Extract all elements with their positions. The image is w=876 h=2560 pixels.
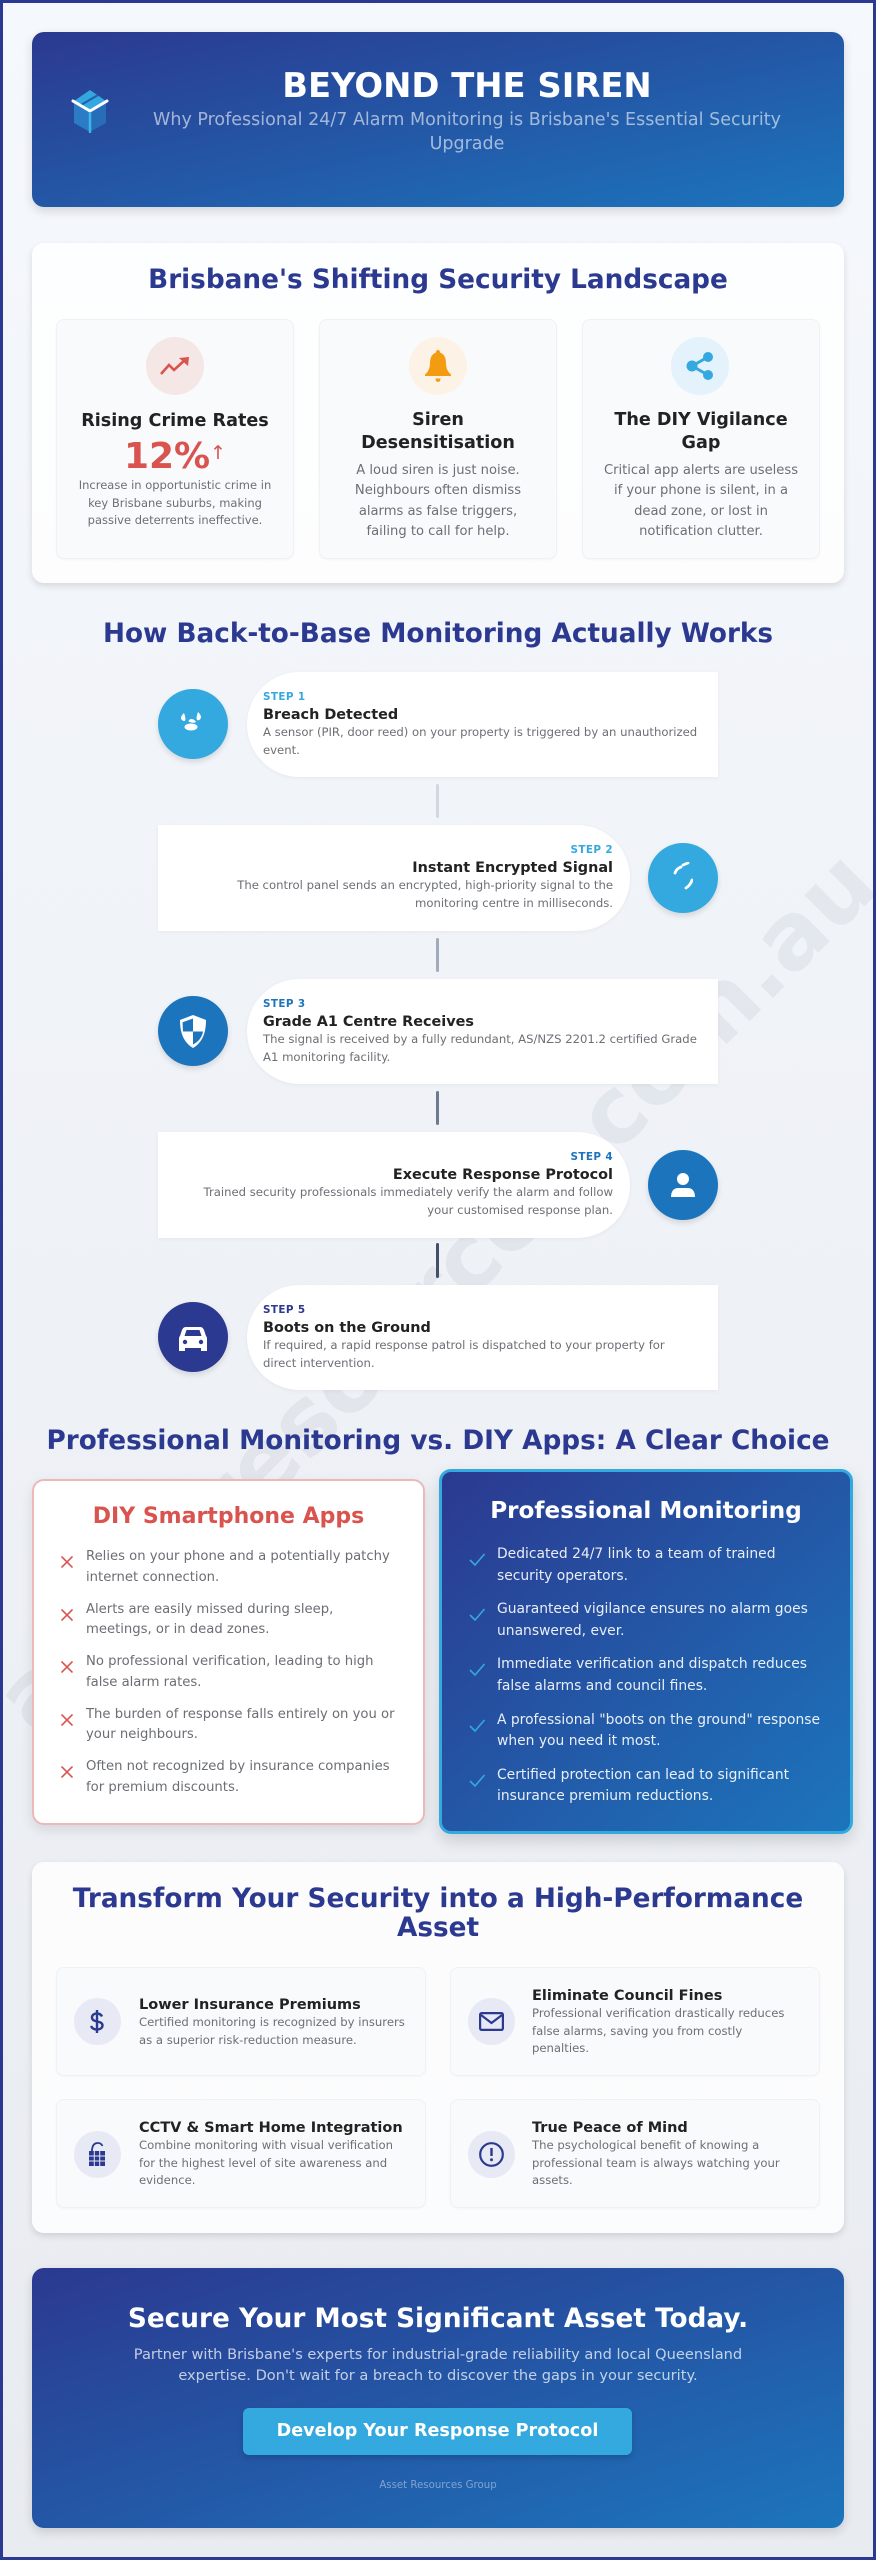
- step card: [247, 672, 718, 777]
- card text: if your phone is silent, in a: [614, 483, 788, 498]
- connector: [436, 1091, 439, 1125]
- step description: [237, 878, 613, 910]
- icon: dollar: [74, 1998, 121, 2045]
- item 4: A professional "boots on the ground" response: [497, 1712, 820, 1728]
- item 1: security operators.: [497, 1568, 628, 1584]
- item 5: Certified protection can lead to significant: [497, 1766, 789, 1782]
- benefit text: [532, 2138, 780, 2187]
- card text: [355, 463, 521, 539]
- benefit text: evidence.: [139, 2173, 195, 2187]
- benefit text: false alarms, saving you from costly: [532, 2024, 742, 2038]
- benefit title: True Peace of Mind: [532, 2120, 688, 2136]
- step title: Breach Detected: [263, 707, 398, 723]
- item 4: your neighbours.: [86, 1727, 198, 1742]
- card text: alarms as false triggers,: [359, 504, 517, 519]
- icon: share nodes: [671, 337, 729, 395]
- step card: [247, 979, 718, 1084]
- step description: A sensor (PIR, door reed) on your property is triggered by an unauthorized: [263, 725, 697, 739]
- benefit text: Professional verification drastically reduces: [532, 2006, 784, 2020]
- step description: monitoring centre in milliseconds.: [415, 896, 613, 910]
- item 4: [61, 1706, 395, 1742]
- benefit text: [139, 2015, 405, 2047]
- CTA text: Partner with Brisbane's experts for industrial-grade reliability and local Queensland: [134, 2346, 742, 2363]
- list: professional benefits: [470, 1546, 820, 1804]
- call to action banner: [32, 2268, 844, 2528]
- benefit text: as a superior risk-reduction measure.: [139, 2033, 357, 2047]
- statistic: 12 percent up: 12%↑: [124, 436, 226, 477]
- item 1: Dedicated 24/7 link to a team of trained: [497, 1546, 776, 1562]
- hero subtitle: [153, 110, 781, 154]
- step label: STEP 4: [570, 1151, 613, 1163]
- benefit text: [139, 2138, 393, 2187]
- hero subtitle: Upgrade: [430, 134, 504, 154]
- step label: STEP 3: [263, 998, 306, 1010]
- card: true peace of mind: [450, 2099, 820, 2208]
- icon: padlock grid: [74, 2131, 121, 2178]
- step description: [262, 1032, 697, 1064]
- benefit text: Combine monitoring with visual verification: [139, 2138, 393, 2152]
- item 4: The burden of response falls entirely on you or: [86, 1706, 395, 1722]
- card: DIY vigilance gap: [582, 319, 820, 559]
- item 2: Alerts are easily missed during sleep,: [86, 1602, 333, 1616]
- step description: [263, 725, 697, 756]
- item 5: [470, 1766, 789, 1804]
- card text: Critical app alerts are useless: [604, 463, 798, 478]
- step description: The signal is received by a fully redundant, AS/NZS 2201.2 certified Grade: [263, 1032, 697, 1046]
- card: lower insurance premiums: [56, 1967, 426, 2076]
- item 2: Guaranteed vigilance ensures no alarm goes: [497, 1601, 808, 1617]
- benefit title: Eliminate Council Fines: [532, 1988, 722, 2004]
- step description: Trained security professionals immediately verify the alarm and follow: [204, 1185, 613, 1199]
- hero banner: [32, 32, 844, 207]
- card title: The DIY Vigilance: [614, 410, 788, 430]
- icon: shield: [158, 996, 228, 1066]
- step label: STEP 1: [263, 691, 306, 703]
- connector: [436, 784, 439, 818]
- connector: [436, 938, 439, 972]
- panel: DIY smartphone apps: [32, 1479, 425, 1825]
- card text: failing to call for help.: [366, 524, 510, 539]
- item 5: [61, 1759, 390, 1794]
- card: CCTV and smart home: [56, 2099, 426, 2208]
- item 2: [470, 1601, 808, 1638]
- benefit title: Lower Insurance Premiums: [139, 1997, 361, 2013]
- item 4: when you need it most.: [497, 1733, 660, 1749]
- card title: [361, 410, 515, 453]
- benefit text: professional team is always watching your: [532, 2156, 780, 2170]
- card text: [604, 463, 798, 539]
- step title: Instant Encrypted Signal: [412, 860, 613, 876]
- step card: [247, 1285, 718, 1390]
- card text: key Brisbane suburbs, making: [88, 496, 262, 510]
- card text: Neighbours often dismiss: [355, 483, 521, 498]
- item 2: meetings, or in dead zones.: [86, 1622, 269, 1637]
- footer credit: Asset Resources Group: [379, 2480, 497, 2491]
- step 3: [156, 979, 718, 1084]
- step 2: [158, 825, 720, 931]
- CTA heading: Secure Your Most Significant Asset Today.: [128, 2304, 748, 2334]
- panel title: DIY Smartphone Apps: [93, 1504, 364, 1529]
- card title: Desensitisation: [361, 433, 515, 453]
- icon: breach signal: [158, 689, 228, 759]
- step description: A1 monitoring facility.: [263, 1050, 390, 1064]
- card text: passive deterrents ineffective.: [88, 513, 262, 527]
- step description: event.: [263, 742, 300, 756]
- step title: Boots on the Ground: [263, 1320, 431, 1336]
- panel: professional monitoring: [439, 1469, 853, 1834]
- step description: [263, 1338, 665, 1370]
- card text: A loud siren is just noise.: [356, 463, 520, 478]
- heading: how monitoring works: How Back-to-Base Monitoring Actually Works: [103, 619, 773, 649]
- item 1: [61, 1549, 390, 1584]
- CTA text: [134, 2346, 742, 2384]
- step label: STEP 5: [263, 1304, 306, 1316]
- item 3: [61, 1654, 374, 1690]
- card: eliminate council fines: [450, 1967, 820, 2076]
- CTA button: Develop Your Response Protocol: [277, 2421, 598, 2441]
- icon: trend line: [146, 337, 204, 395]
- card title: Gap: [682, 433, 720, 453]
- icon: user: [648, 1150, 718, 1220]
- step 1: [156, 672, 718, 777]
- item 5: for premium discounts.: [86, 1780, 239, 1794]
- item 5: insurance premium reductions.: [497, 1788, 713, 1804]
- item 3: Immediate verification and dispatch reduces: [497, 1656, 807, 1672]
- heading: [72, 1884, 803, 1943]
- item 3: [470, 1656, 807, 1694]
- heading: Transform Your Security into a High-Performance: [73, 1884, 803, 1914]
- CTA text: expertise. Don't wait for a breach to discover the gaps in your security.: [178, 2367, 698, 2384]
- item 2: [61, 1602, 333, 1637]
- benefit text: assets.: [532, 2173, 573, 2187]
- card: siren desensitisation: [319, 319, 557, 559]
- item 3: false alarms and council fines.: [497, 1678, 707, 1694]
- benefit title: CCTV & Smart Home Integration: [139, 2120, 403, 2136]
- item 4: [470, 1712, 820, 1749]
- panel: high-performance asset: [32, 1862, 844, 2233]
- step label: STEP 2: [570, 844, 613, 856]
- heading: Brisbane's Shifting Security Landscape: [148, 265, 728, 295]
- card text: notification clutter.: [639, 524, 763, 539]
- step 5: [156, 1285, 718, 1390]
- benefit text: for the highest level of site awareness and: [139, 2156, 387, 2170]
- step title: Execute Response Protocol: [393, 1167, 613, 1183]
- list: DIY drawbacks: [61, 1549, 395, 1794]
- card title: Siren: [412, 410, 464, 430]
- card text: [79, 478, 271, 527]
- icon: signal arcs: [648, 843, 718, 913]
- step card: [158, 1132, 630, 1238]
- step card: [158, 825, 630, 931]
- panel: security landscape: [32, 243, 844, 583]
- item 1: [470, 1546, 776, 1584]
- card: rising crime rates: [56, 319, 294, 559]
- card text: dead zone, or lost in: [634, 504, 768, 519]
- item 3: false alarm rates.: [86, 1674, 201, 1690]
- step 4: [158, 1132, 720, 1238]
- item 1: internet connection.: [86, 1570, 219, 1584]
- icon: bell: [409, 337, 467, 395]
- item 1: Relies on your phone and a potentially patchy: [86, 1549, 390, 1564]
- icon: car: [158, 1302, 228, 1372]
- step title: Grade A1 Centre Receives: [263, 1014, 474, 1030]
- heading: Asset: [397, 1913, 479, 1943]
- icon: envelope: [468, 1998, 515, 2045]
- step description: your customised response plan.: [427, 1202, 613, 1216]
- panel title: Professional Monitoring: [490, 1498, 802, 1524]
- heading: comparison: Professional Monitoring vs. DIY Apps: A Clear Choice: [46, 1426, 830, 1456]
- item 3: No professional verification, leading to high: [86, 1654, 374, 1669]
- step description: direct intervention.: [263, 1356, 375, 1370]
- item 5: Often not recognized by insurance companies: [86, 1759, 390, 1774]
- benefit text: penalties.: [532, 2041, 589, 2055]
- card title: [614, 410, 788, 453]
- icon: alert circle: [468, 2131, 515, 2178]
- icon: cube logo: [71, 90, 109, 133]
- CTA button: [243, 2408, 632, 2455]
- hero subtitle: Why Professional 24/7 Alarm Monitoring is Brisbane's Essential Security: [153, 110, 781, 130]
- card text: Increase in opportunistic crime in: [79, 478, 271, 492]
- card title: Rising Crime Rates: [81, 411, 269, 431]
- benefit text: [532, 2006, 784, 2055]
- hero title: BEYOND THE SIREN: [282, 66, 652, 105]
- step description: If required, a rapid response patrol is dispatched to your property for: [263, 1338, 665, 1352]
- connector: [436, 1243, 439, 1278]
- item 2: unanswered, ever.: [497, 1622, 625, 1638]
- benefit text: Certified monitoring is recognized by insurers: [139, 2015, 405, 2029]
- step description: [203, 1185, 613, 1216]
- benefit text: The psychological benefit of knowing a: [532, 2138, 759, 2152]
- step description: The control panel sends an encrypted, high-priority signal to the: [237, 878, 613, 892]
